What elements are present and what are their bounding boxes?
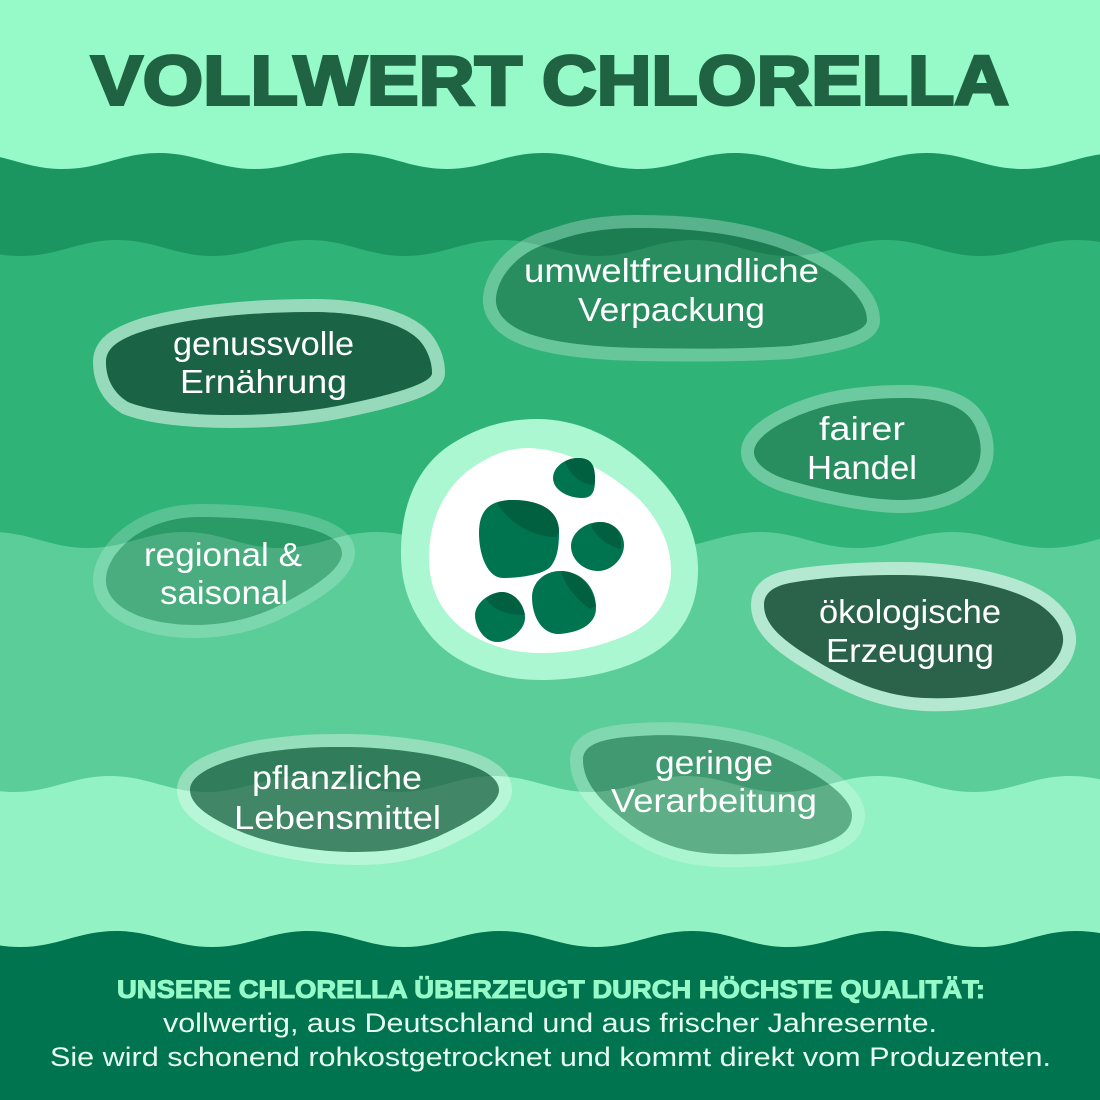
- bubble: ökologische Erzeugung: Erzeugung: [826, 632, 994, 669]
- bubble: ökologische Erzeugung: ökologische: [819, 593, 1001, 630]
- bubble: genussvolle Ernährung: genussvolle: [173, 325, 354, 362]
- bubble: pflanzliche Lebensmittel: Lebensmittel: [234, 799, 441, 836]
- wave band 4: [0, 776, 1100, 1100]
- bubble: umweltfreundliche Verpackung: [496, 228, 867, 349]
- wave band 2: [0, 240, 1100, 1100]
- bubble: regional & saisonal: regional &: [144, 536, 302, 573]
- footer text block: vollwertig, aus Deutschland und aus frischer Jahresernte.: [163, 1008, 937, 1038]
- title: VOLLWERT: [91, 42, 522, 120]
- bubble: pflanzliche Lebensmittel: [190, 747, 499, 852]
- bubble: ökologische Erzeugung: [764, 575, 1063, 698]
- bubble: fairer Handel: fairer: [819, 410, 905, 447]
- bubble: geringe Verarbeitung: geringe: [655, 744, 773, 781]
- bubble: geringe Verarbeitung: Verarbeitung: [611, 782, 817, 819]
- central illustration: chlorella cell: [401, 419, 698, 680]
- title: CHLORELLA: [542, 42, 1009, 120]
- title: [91, 42, 1009, 120]
- footer text block: Sie wird schonend rohkostgetrocknet und kommt direkt vom Produzenten.: [50, 1042, 1051, 1072]
- bubble: genussvolle Ernährung: [106, 312, 432, 415]
- bubble: fairer Handel: [754, 398, 981, 500]
- footer band: [0, 931, 1100, 1100]
- bubble: fairer Handel: Handel: [807, 449, 917, 486]
- bubble: genussvolle Ernährung: Ernährung: [180, 363, 347, 400]
- bubble: umweltfreundliche Verpackung: umweltfreundliche: [524, 252, 819, 289]
- bubble: regional & saisonal: [106, 517, 342, 625]
- footer text block: [50, 975, 1051, 1072]
- bubble: umweltfreundliche Verpackung: Verpackung: [578, 291, 765, 328]
- bubble: pflanzliche Lebensmittel: pflanzliche: [252, 759, 422, 796]
- wave band 3: [0, 532, 1100, 1100]
- footer text block: UNSERE CHLORELLA ÜBERZEUGT DURCH HÖCHSTE QUALITÄT:: [117, 975, 985, 1004]
- bubble: regional & saisonal: saisonal: [160, 574, 288, 611]
- bubble: geringe Verarbeitung: [583, 735, 852, 854]
